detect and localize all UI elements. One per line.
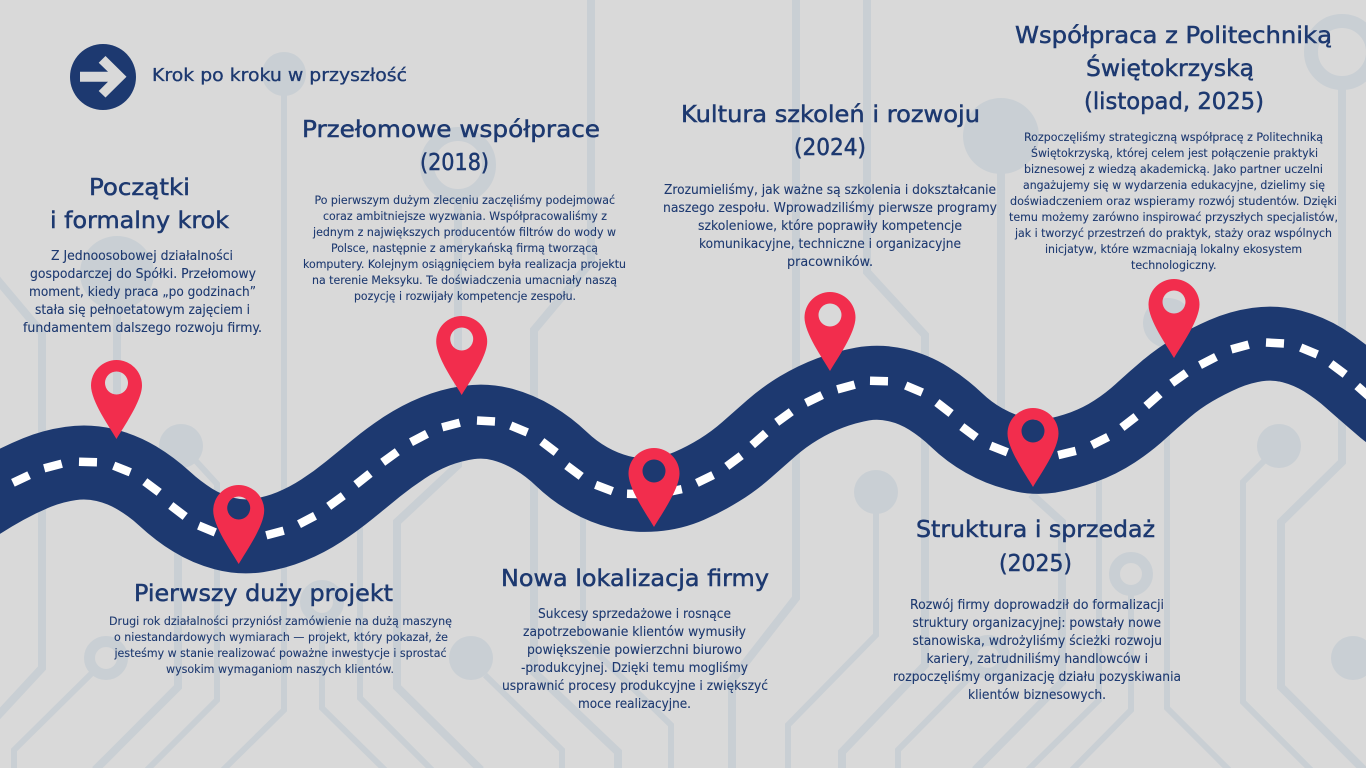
panel: Nowa lokalizacja firmy <box>501 566 769 712</box>
text block: pracowników. <box>787 255 873 270</box>
text block: biznesowej z wiedzą akademicką. Jako partner uczelni <box>1024 162 1323 176</box>
panel: Początki i formalny krok <box>23 175 262 336</box>
text block: powiększenie powierzchni biurowo <box>527 643 742 658</box>
text block: szkoleniowe, które poprawiły kompetencje <box>698 219 962 234</box>
heading: Świętokrzyską <box>1086 54 1254 82</box>
heading: Przełomowe współprace <box>302 117 600 143</box>
text block: fundamentem dalszego rozwoju firmy. <box>23 321 262 336</box>
heading: (2025) <box>999 551 1072 577</box>
text block <box>303 193 626 303</box>
text block: na terenie Meksyku. Te doświadczenia umacniały naszą <box>312 273 617 287</box>
heading: Struktura i sprzedaż <box>916 517 1155 543</box>
heading: Współpraca z Politechniką <box>1015 23 1332 49</box>
text block: doświadczeniem oraz wspieramy rozwój studentów. Dzięki <box>1010 194 1337 208</box>
text block: o niestandardowych wymiarach — projekt, który pokazał, że <box>114 630 448 644</box>
text block: rozpoczęliśmy organizację działu pozyskiwania <box>893 670 1181 685</box>
text block: jak i tworzyć przestrzeń do praktyk, staży oraz wspólnych <box>1014 226 1332 240</box>
text block: usprawnić procesy produkcyjne i zwiększyć <box>502 679 768 694</box>
text block <box>1009 130 1338 272</box>
text block: temu możemy zarówno inspirować przyszłych specjalistów, <box>1009 210 1338 224</box>
heading: i formalny krok <box>50 208 230 234</box>
text block <box>502 607 768 712</box>
text block: stała się pełnoetatowym zajęciem i <box>35 303 250 318</box>
text block <box>109 614 452 676</box>
icon: map pin 6 <box>1008 408 1058 487</box>
text block: Rozpoczęliśmy strategiczną współpracę z Politechniką <box>1024 130 1323 144</box>
icon: map pin 3 <box>436 316 487 395</box>
text block: coraz ambitniejsze wyzwania. Współpracowaliśmy z <box>323 209 607 223</box>
heading: Pierwszy duży projekt <box>134 581 393 607</box>
heading: (2024) <box>794 135 866 161</box>
text block: technologiczny. <box>1131 258 1216 272</box>
text block: Świętokrzyską, której celem jest połączenie praktyki <box>1031 145 1318 160</box>
title: Krok po kroku w przyszłość <box>152 66 407 86</box>
text block: Z Jednoosobowej działalności <box>51 249 233 264</box>
text block: komunikacyjne, techniczne i organizacyjne <box>699 237 961 252</box>
text block: moment, kiedy praca „po godzinach” <box>29 285 256 300</box>
text block: Drugi rok działalności przyniósł zamówienie na dużą maszynę <box>109 614 452 628</box>
heading <box>916 517 1155 577</box>
icon: map pin 1 <box>91 360 142 439</box>
text block: naszego zespołu. Wprowadziliśmy pierwsze programy <box>663 201 997 216</box>
text block: angażujemy się w wydarzenia edukacyjne, dzielimy się <box>1023 178 1325 192</box>
text block: moce realizacyjne. <box>578 697 691 712</box>
heading: Nowa lokalizacja firmy <box>501 566 769 592</box>
panel: Kultura szkoleń i rozwoju <box>663 102 997 270</box>
panel: Współpraca z Politechniką Świętokrzyską <box>1009 23 1338 272</box>
text block <box>663 183 997 270</box>
heading <box>681 102 980 161</box>
text block: -produkcyjnej. Dzięki temu mogliśmy <box>521 661 748 676</box>
panel: Pierwszy duży projekt <box>109 581 452 676</box>
text block: inicjatyw, które wzmacniają lokalny ekosystem <box>1045 242 1302 256</box>
text block: zapotrzebowanie klientów wymusiły <box>523 625 746 640</box>
text block: stanowiska, wdrożyliśmy ścieżki rozwoju <box>912 634 1162 649</box>
heading: (2018) <box>420 150 489 176</box>
winding road <box>0 342 1366 536</box>
text block: Rozwój firmy doprowadził do formalizacji <box>910 598 1164 613</box>
panel: Struktura i sprzedaż <box>893 517 1181 703</box>
icon: map pin 7 <box>1148 279 1200 358</box>
icon: arrow in circle <box>70 44 136 110</box>
text block: pozycję i rozwijały kompetencje zespołu. <box>354 289 576 303</box>
panel: Przełomowe współprace <box>302 117 626 303</box>
text block: klientów biznesowych. <box>968 688 1106 703</box>
heading <box>50 175 230 234</box>
heading: Początki <box>89 175 190 201</box>
heading <box>302 117 600 176</box>
text block: komputery. Kolejnym osiągnięciem była realizacja projektu <box>303 257 626 271</box>
text block <box>893 598 1181 703</box>
heading: Kultura szkoleń i rozwoju <box>681 102 980 128</box>
text block: Sukcesy sprzedażowe i rosnące <box>538 607 731 622</box>
icon: map pin 5 <box>804 292 856 371</box>
text block: Polsce, następnie z amerykańską firmą tworzącą <box>331 241 598 255</box>
heading: (listopad, 2025) <box>1084 89 1264 115</box>
text block: wysokim wymaganiom naszych klientów. <box>166 662 394 676</box>
text block: kariery, zatrudniliśmy handlowców i <box>926 652 1148 667</box>
text block: Po pierwszym dużym zleceniu zaczęliśmy podejmować <box>314 193 615 207</box>
heading <box>1015 23 1332 115</box>
icon: map pin 4 <box>628 448 680 527</box>
text block: Zrozumieliśmy, jak ważne są szkolenia i dokształcanie <box>664 183 996 198</box>
text block <box>23 249 262 336</box>
text block: jesteśmy w stanie realizować poważne inwestycje i sprostać <box>114 646 446 660</box>
icon: map pin 2 <box>213 485 264 564</box>
text block: gospodarczej do Spółki. Przełomowy <box>30 267 256 282</box>
text block: jednym z największych producentów filtrów do wody w <box>312 225 616 239</box>
text block: struktury organizacyjnej: powstały nowe <box>912 616 1161 631</box>
